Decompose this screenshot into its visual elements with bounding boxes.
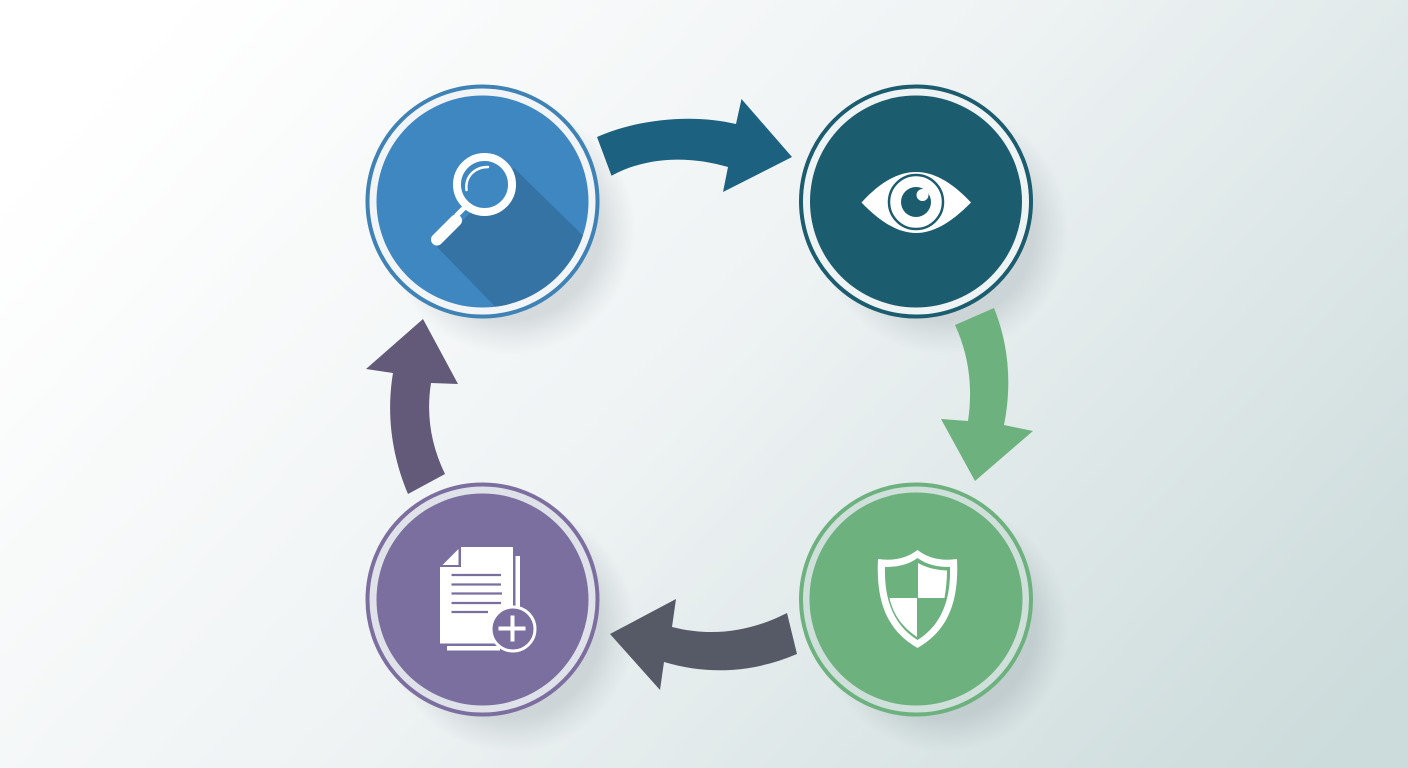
icon: magnifying glass	[437, 157, 512, 240]
arrow: view to protect	[941, 308, 1033, 481]
icon long shadow	[437, 168, 583, 307]
step 1: search circle	[368, 86, 610, 330]
icon: document with plus	[440, 547, 535, 651]
step 2: eye circle	[801, 86, 1031, 316]
icon: eye	[862, 172, 971, 233]
arrow: search to view	[597, 99, 792, 192]
step 4: document circle	[368, 484, 598, 714]
arrow: protect to document	[610, 599, 797, 690]
step 3: shield circle	[801, 484, 1031, 714]
arrow: document to search	[366, 319, 458, 494]
soft shadows behind circles	[386, 104, 1069, 752]
icon: shield	[878, 550, 957, 648]
